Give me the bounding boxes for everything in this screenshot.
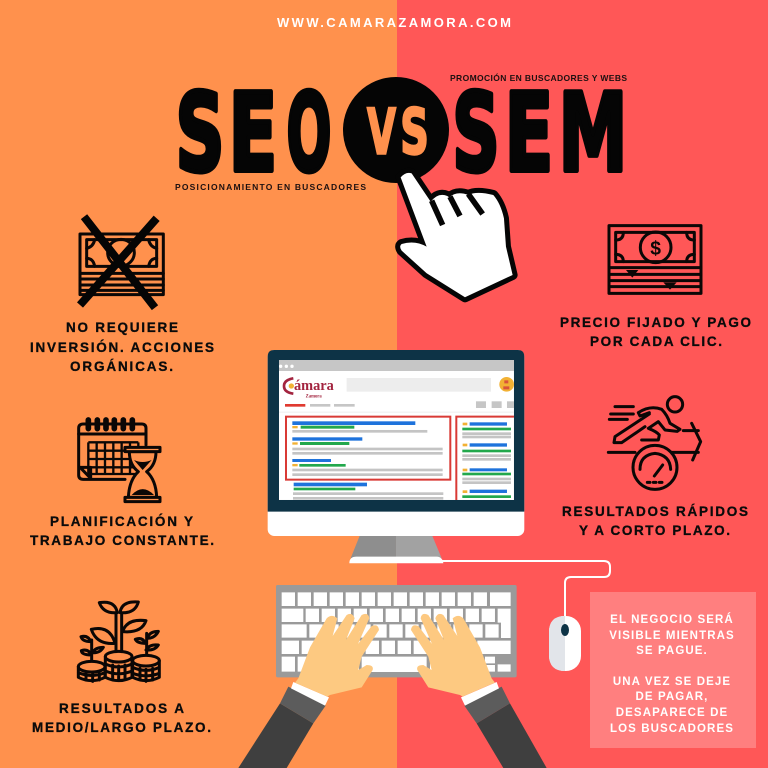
label: resultados a medio/largo plazo: RESULTADOS A: [59, 701, 184, 716]
label: resultados rápidos: RESULTADOS RÁPIDOS: [562, 504, 748, 519]
vs badge: V: [367, 98, 396, 169]
title: SEM: M: [559, 72, 627, 197]
organic search results: [286, 417, 450, 500]
label: precio fijado: PRECIO FIJADO Y PAGO: [560, 315, 751, 330]
vs badge: S: [400, 98, 429, 169]
paid search results: [456, 417, 514, 500]
panel: SEO orange background: [0, 0, 397, 768]
title: SEO: [176, 70, 331, 197]
website url heading: WWW.CAMARAZAMORA.COM: [277, 15, 511, 30]
subtitle: SEO: POSICIONAMIENTO EN BUSCADORES: [175, 182, 366, 192]
browser screen: [279, 360, 514, 500]
right hand and arm: [411, 614, 547, 768]
icon: plant growing from coins: [78, 602, 159, 681]
label: no requiere inversión: NO REQUIERE: [66, 320, 178, 335]
label: planificación: TRABAJO CONSTANTE.: [30, 533, 214, 548]
left hand and arm: [238, 614, 379, 768]
icon: banknotes: $: [650, 238, 661, 259]
callout: visibility note: VISIBLE MIENTRAS: [609, 630, 735, 642]
callout: visibility note: LOS BUSCADORES: [610, 723, 734, 735]
callout: visibility note: [590, 592, 756, 748]
icon: pointing hand cursor: [400, 173, 513, 297]
icon: calendar and hourglass: [79, 420, 160, 502]
label: no requiere inversión: ORGÁNICAS.: [70, 359, 173, 374]
label: precio fijado: POR CADA CLIC.: [590, 334, 722, 349]
title: SEM: S: [452, 71, 500, 197]
logo: Cámara Zamora: Zamora: [306, 394, 322, 399]
monitor body: [268, 350, 524, 536]
callout: visibility note: UNA VEZ SE DEJE: [613, 676, 731, 688]
label: resultados a medio/largo plazo: MEDIO/LARGO PLAZO.: [32, 720, 211, 735]
computer mouse: [549, 616, 581, 671]
label: resultados rápidos: Y A CORTO PLAZO.: [579, 523, 730, 538]
icon: crossed out money: [80, 217, 163, 308]
title: SEM: [452, 70, 627, 197]
label: planificación: PLANIFICACIÓN Y: [50, 514, 193, 529]
keyboard: [276, 585, 517, 677]
vs badge: [343, 77, 449, 183]
callout: visibility note: DESAPARECE DE: [616, 707, 728, 719]
label: no requiere inversión: INVERSIÓN. ACCIONES: [30, 340, 214, 355]
title: SEO: S: [176, 71, 224, 197]
logo: Cámara Zamora: ámara: [294, 378, 334, 394]
callout: visibility note: EL NEGOCIO SERÁ: [610, 613, 734, 626]
callout: visibility note: SE PAGUE.: [636, 645, 708, 657]
label: no requiere inversión: [30, 320, 214, 374]
monitor illustration: [268, 350, 524, 563]
label: planificación: [30, 514, 214, 548]
label: precio fijado: [560, 315, 751, 349]
mouse cable: [440, 561, 610, 616]
callout: visibility note: DE PAGAR,: [636, 691, 708, 703]
icon: runner and speedometer: [608, 397, 701, 489]
monitor stand: [349, 535, 443, 563]
logo: Cámara Zamora: [284, 378, 334, 399]
title: SEO: O: [287, 71, 331, 197]
title: SEO: E: [229, 70, 277, 196]
panel: SEM red background: [397, 0, 768, 768]
label: resultados a medio/largo plazo: [32, 701, 211, 735]
title: SEM: E: [505, 70, 553, 196]
label: resultados rápidos: [562, 504, 748, 538]
icon: banknotes: [609, 226, 701, 293]
subtitle: SEM: PROMOCIÓN EN BUSCADORES Y WEBS: [450, 72, 627, 83]
